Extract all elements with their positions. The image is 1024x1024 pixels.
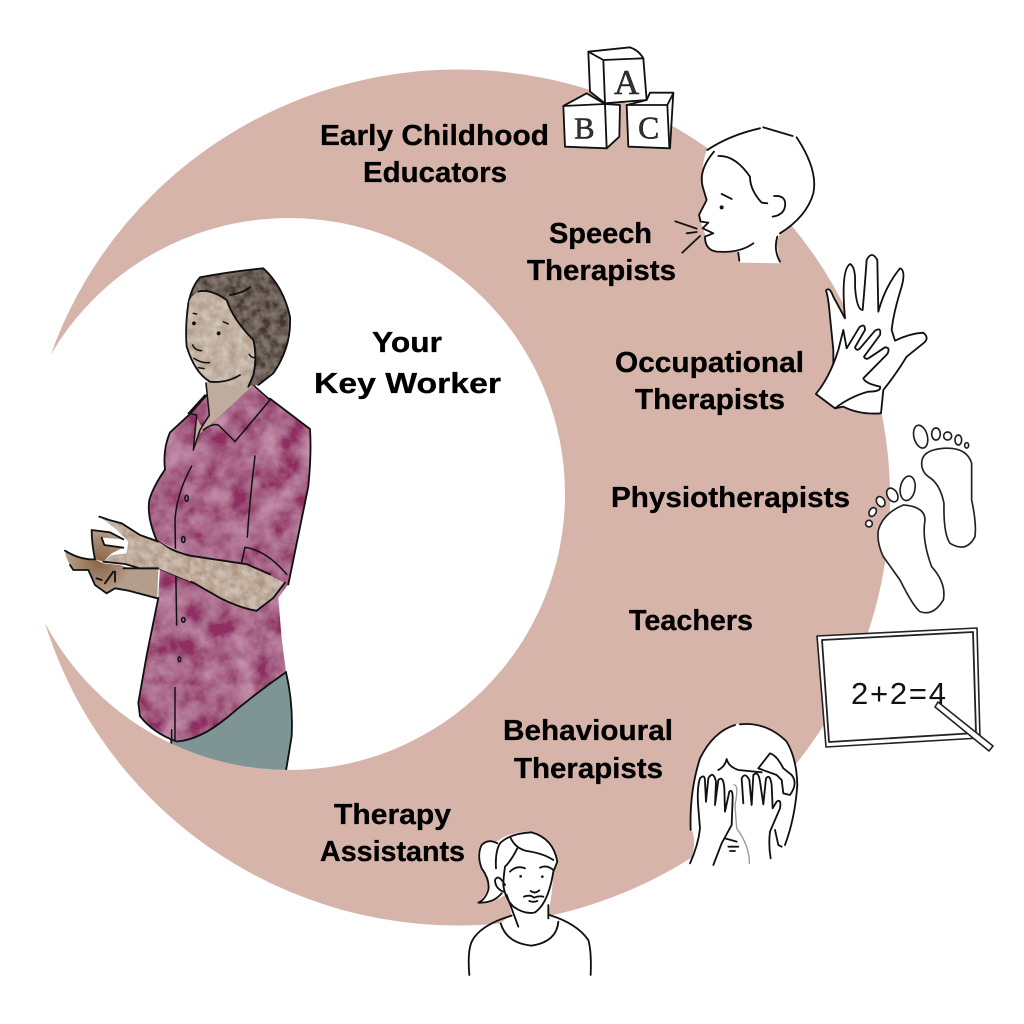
face xyxy=(186,291,255,387)
palm and thumb xyxy=(92,531,122,562)
label: Therapy Assistants: Assistants xyxy=(320,836,465,868)
label: Occupational Therapists: Therapists xyxy=(635,384,785,416)
forearm xyxy=(150,537,285,611)
label: Speech Therapists xyxy=(527,218,676,287)
right foot xyxy=(911,424,975,547)
sum text: 2+2=4 xyxy=(851,676,946,711)
label: Early Childhood Educators xyxy=(320,120,549,189)
label: Your Key Worker: Key Worker xyxy=(314,368,501,400)
label: Therapy Assistants: Therapy xyxy=(334,799,451,831)
block B: B xyxy=(574,111,595,145)
shirt xyxy=(138,385,311,741)
icon: adult and child hands xyxy=(816,255,927,414)
label: Teachers: Teachers xyxy=(629,605,753,637)
pen xyxy=(935,702,993,751)
label: Therapy Assistants xyxy=(320,799,465,868)
label: Behavioural Therapists xyxy=(503,715,673,785)
label: Behavioural Therapists: Behavioural xyxy=(503,715,673,747)
shirt seams xyxy=(172,456,287,740)
icon: whiteboard with sum xyxy=(817,628,993,751)
label: Behavioural Therapists: Therapists xyxy=(514,753,663,785)
label: Early Childhood Educators: Early Childhood xyxy=(320,120,549,152)
crescent background xyxy=(13,70,890,926)
label: Your Key Worker xyxy=(314,327,501,400)
block C: C xyxy=(638,110,659,145)
block A: A xyxy=(614,63,640,102)
hands xyxy=(65,517,191,598)
left hand xyxy=(690,775,733,865)
icon: child speaking xyxy=(675,127,814,263)
facial features xyxy=(193,313,255,369)
label: Occupational Therapists: Occupational xyxy=(615,347,804,379)
upper hand xyxy=(99,517,191,582)
lower hand and wrist xyxy=(65,551,158,598)
icon: footprints xyxy=(866,424,975,613)
label: Early Childhood Educators: Educators xyxy=(363,157,507,189)
label: Your Key Worker: Your xyxy=(372,327,442,359)
illustration: key worker woman xyxy=(65,268,311,777)
speech lines xyxy=(675,221,700,253)
icon: therapy assistant xyxy=(469,832,591,975)
left foot xyxy=(866,475,944,613)
buttons xyxy=(178,495,188,662)
hair xyxy=(188,268,290,387)
label: Speech Therapists: Therapists xyxy=(527,255,676,287)
label: Occupational Therapists xyxy=(615,347,804,416)
head xyxy=(186,268,290,387)
icon: alphabet blocks xyxy=(563,47,673,148)
neck xyxy=(188,382,270,450)
icon: child covering face xyxy=(690,724,797,865)
right hand xyxy=(742,773,782,858)
hair bow xyxy=(758,753,795,795)
label: Physiotherapists: Physiotherapists xyxy=(611,482,850,514)
child hand outline xyxy=(816,326,889,408)
trousers xyxy=(170,672,292,777)
label: Speech Therapists: Speech xyxy=(549,218,652,250)
